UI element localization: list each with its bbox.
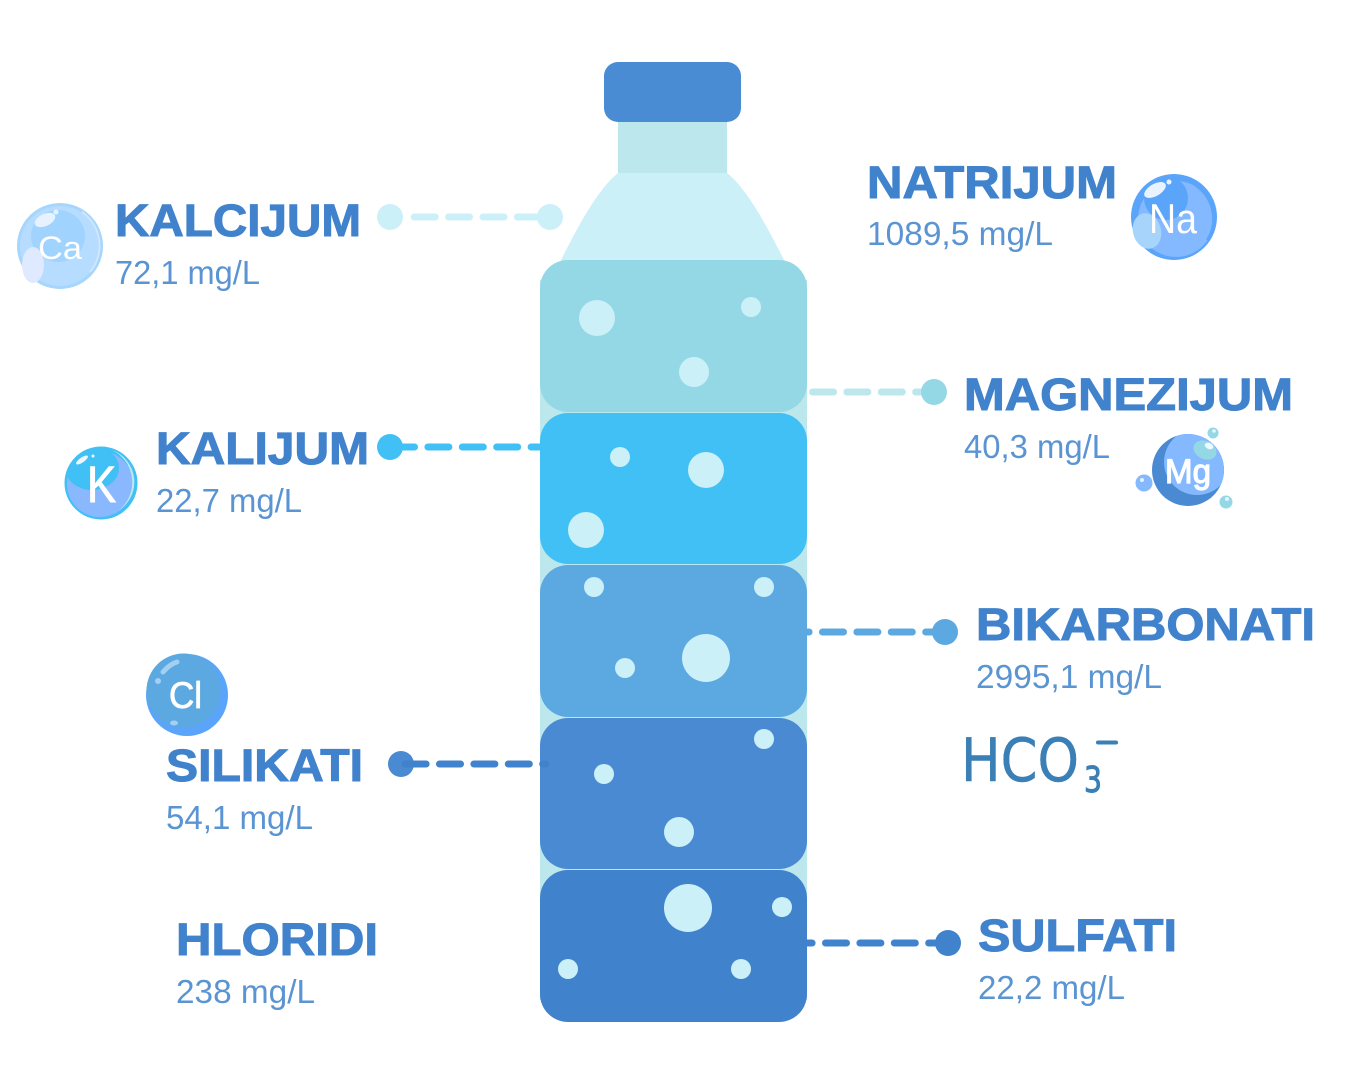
- formula: bicarbonate: 3: [1084, 760, 1102, 801]
- label: kalcijum: KALCIJUM: [115, 195, 361, 246]
- connector: bikarbonati: [788, 619, 958, 645]
- bottle neck: [618, 122, 727, 173]
- label: bikarbonati: BIKARBONATI: [976, 599, 1315, 650]
- label: silikati: 54,1 mg/L: [166, 799, 313, 836]
- water bottle: [540, 62, 807, 1022]
- segment: magnezijum: [540, 260, 807, 412]
- label: bikarbonati: 2995,1 mg/L: [976, 658, 1162, 695]
- icon: magnesium bubbles: [1136, 428, 1232, 508]
- label: kalcijum: 72,1 mg/L: [115, 254, 260, 291]
- icon: calcium bubble: [17, 203, 103, 289]
- connector: silikati: [388, 751, 546, 777]
- icon: sodium bubble: Na: [1149, 195, 1198, 242]
- label: magnezijum: [964, 369, 1293, 465]
- label: kalcijum: [115, 195, 361, 291]
- label: natrijum: 1089,5 mg/L: [867, 215, 1053, 252]
- label: silikati: SILIKATI: [166, 740, 363, 791]
- bottle body: [540, 280, 807, 1000]
- icon: potassium bubble: [64, 446, 138, 520]
- label: kalijum: KALIJUM: [156, 423, 369, 474]
- label: hloridi: [176, 914, 378, 1010]
- label: silikati: [166, 740, 363, 836]
- label: natrijum: [867, 157, 1117, 252]
- label: kalijum: [156, 423, 369, 519]
- segment: kalijum: [540, 413, 807, 564]
- icon: potassium bubble: K: [87, 456, 116, 513]
- connector: sulfati: [791, 930, 961, 956]
- segment: bikarbonati: [540, 565, 807, 717]
- label: magnezijum: MAGNEZIJUM: [964, 369, 1293, 420]
- label: sulfati: SULFATI: [978, 910, 1177, 961]
- label: magnezijum: 40,3 mg/L: [964, 428, 1110, 465]
- label: sulfati: 22,2 mg/L: [978, 969, 1125, 1006]
- bottle cap: [604, 62, 741, 122]
- label: natrijum: NATRIJUM: [867, 157, 1117, 208]
- formula: bicarbonate: HCO: [961, 726, 1079, 796]
- label: sulfati: [978, 910, 1177, 1006]
- icon: chloride bubble: Cl: [169, 675, 202, 716]
- label: kalijum: 22,7 mg/L: [156, 482, 302, 519]
- label: hloridi: 238 mg/L: [176, 973, 315, 1010]
- label: bikarbonati: [976, 599, 1315, 695]
- icon: calcium bubble: Ca: [38, 230, 82, 266]
- icon: magnesium bubbles: Mg: [1165, 453, 1211, 491]
- segment: silikati: [540, 718, 807, 869]
- connector: kalcijum: [377, 204, 563, 230]
- bottle shoulder: [560, 173, 785, 262]
- segment: sulfati: [540, 870, 807, 1022]
- connector: kalijum: [377, 434, 550, 460]
- connector: magnezijum: [778, 379, 947, 405]
- icon: chloride bubble: [146, 654, 228, 736]
- icon: sodium bubble: [1129, 174, 1217, 260]
- label: hloridi: HLORIDI: [176, 914, 378, 965]
